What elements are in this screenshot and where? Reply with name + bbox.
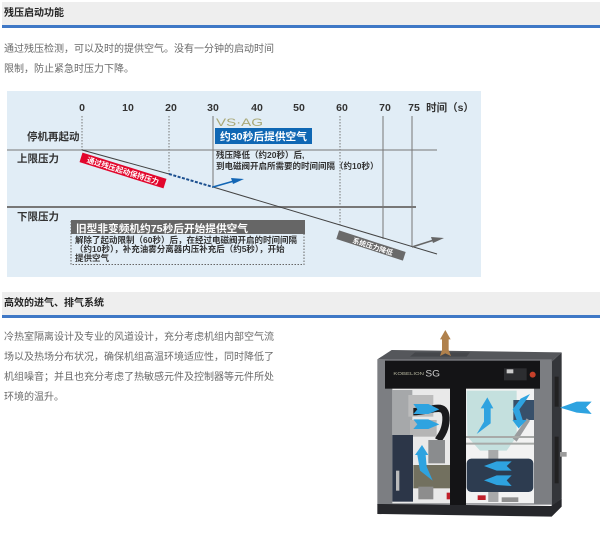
row labels bbox=[17, 130, 80, 223]
label: air within 30 seconds: 约30秒后提供空气 bbox=[220, 130, 308, 143]
heading: residual pressure start: 残压启动功能 bbox=[4, 8, 64, 19]
old model callout: 解除了起动限制（60秒）后，在经过电磁阀开启的时间间隔 bbox=[75, 235, 297, 245]
time axis labels: 60 bbox=[336, 102, 348, 114]
time axis labels: 40 bbox=[251, 102, 263, 114]
row labels: 下限压力 bbox=[17, 210, 59, 223]
label: air within 30 seconds bbox=[215, 128, 312, 144]
arrow: old model air supply bbox=[412, 237, 444, 247]
pressure decline line bbox=[82, 150, 437, 254]
time axis labels: 20 bbox=[165, 102, 177, 114]
illustration: compressor machine: SG bbox=[425, 369, 440, 379]
row labels: 上限压力 bbox=[17, 152, 59, 165]
old model callout: 提供空气 bbox=[75, 253, 110, 263]
time axis labels: 75 bbox=[408, 102, 420, 114]
heading: intake and exhaust bbox=[2, 292, 600, 318]
note: residual pressure timing: 残压降低（约20秒）后, bbox=[216, 150, 304, 160]
fitting on side bbox=[560, 452, 567, 457]
note: residual pressure timing bbox=[216, 150, 378, 171]
text block: residual pressure intro: 通过残压检测，可以及时的提供空气。没有一分钟的启动时间 bbox=[4, 44, 274, 55]
arrow: cool air intake bbox=[560, 402, 592, 414]
machine cabinet bbox=[377, 350, 562, 517]
row labels: 停机再起动 bbox=[27, 130, 80, 143]
pressure limit lines bbox=[7, 116, 437, 247]
grey label: system pressure drop: 系统压力降低 bbox=[351, 236, 394, 257]
left compartment components bbox=[392, 390, 450, 502]
text block: intake and exhaust description: 冷热室隔离设计及专业的风道设计，充分考虑机组内部空气流 bbox=[4, 332, 274, 343]
heading: intake and exhaust: 高效的进气、排气系统 bbox=[4, 298, 104, 309]
note: residual pressure timing: 到电磁阀开启所需要的时间间隔（约10秒） bbox=[216, 161, 378, 171]
VS-AG logo: VS·AG bbox=[216, 117, 263, 129]
text block: intake and exhaust description: 场以及热场分布状况，确保机组高温环境适应性，同时降低了 bbox=[4, 352, 274, 363]
old model callout bbox=[71, 220, 305, 264]
control panel bbox=[504, 368, 536, 380]
grey label: system pressure drop bbox=[336, 230, 406, 261]
heading: residual pressure start bbox=[2, 2, 600, 28]
text block: residual pressure intro bbox=[4, 43, 274, 75]
right compartment components bbox=[466, 391, 534, 502]
time axis labels: 30 bbox=[207, 102, 219, 114]
time axis labels: 0 bbox=[79, 102, 85, 114]
arrow: VS-AG air supply bbox=[213, 178, 244, 187]
old model callout: （约10秒），补充油雾分离器内压补充后（约5秒），开始 bbox=[75, 244, 285, 254]
text block: residual pressure intro: 限制，防止紧急时压力下降。 bbox=[4, 64, 134, 75]
time axis labels: 50 bbox=[293, 102, 305, 114]
arrow: hot air exhaust bbox=[440, 330, 451, 356]
machine brand text: KOBELION bbox=[393, 371, 424, 376]
internal airflow arrows bbox=[413, 394, 530, 486]
time axis labels: 时间（s） bbox=[426, 101, 474, 114]
red label: maintain pressure: 通过残压起动保持压力 bbox=[86, 155, 160, 186]
text block: intake and exhaust description: 环境的温升。 bbox=[4, 392, 64, 403]
text block: intake and exhaust description: 机组噪音；并且也充分考虑了热敏感元件及控制器等元件所处 bbox=[4, 372, 274, 383]
text block: intake and exhaust description bbox=[4, 331, 274, 403]
time axis labels: 10 bbox=[122, 102, 134, 114]
old model callout: 旧型非变频机约75秒后开始提供空气 bbox=[76, 222, 248, 235]
chart panel background bbox=[7, 91, 481, 277]
time axis labels: 70 bbox=[379, 102, 391, 114]
time axis labels bbox=[79, 101, 474, 114]
